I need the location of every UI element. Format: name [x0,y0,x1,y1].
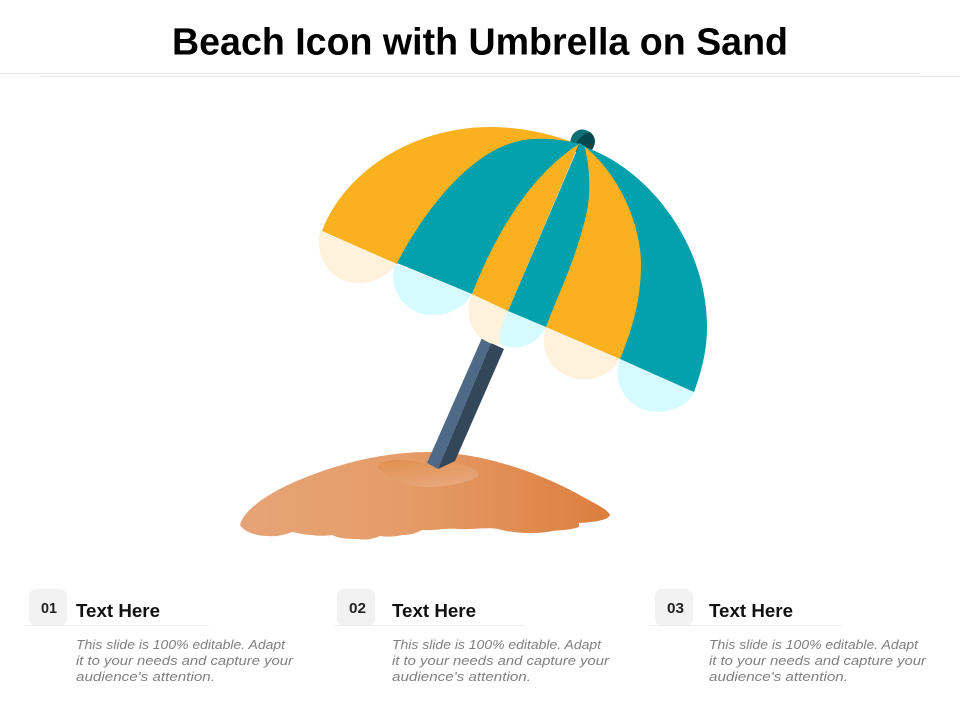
canopy panel 6 teal [579,143,707,392]
description 02: it to your needs and capture your [392,653,610,668]
description 01: This slide is 100% editable. Adapt [76,637,286,652]
item 03 [651,589,927,684]
description 03 [709,637,927,684]
sand mound [240,452,610,540]
item 02 [333,589,610,684]
description 02 [392,637,610,684]
umbrella knob [567,127,598,157]
icon: beach umbrella on sand [240,127,707,540]
description 02: This slide is 100% editable. Adapt [392,637,602,652]
number badge 03: 03 [667,600,684,617]
heading 01: Text Here [76,601,160,621]
umbrella canopy [322,127,707,392]
number badge 01 [29,589,67,626]
canopy panel 5 yellow [546,146,641,359]
description 03: it to your needs and capture your [709,653,927,668]
description 03: audience's attention. [709,669,848,684]
heading 02: Text Here [392,601,476,621]
description 01: it to your needs and capture your [76,653,294,668]
description 01: audience's attention. [76,669,215,684]
canopy panel 1 yellow [322,127,572,264]
title: Beach Icon with Umbrella on Sand [172,22,788,64]
sand hole [377,460,478,487]
scallop valance [319,231,694,412]
number badge 02: 02 [349,600,366,617]
item 01 [25,589,294,684]
description 02: audience's attention. [392,669,531,684]
canopy panel 3 yellow [472,144,579,311]
number badge 01: 01 [41,600,57,617]
canopy panel 4 teal [508,143,589,327]
umbrella pole [427,338,504,469]
number badge 03 [655,589,693,626]
description 01 [76,637,294,684]
canopy panel 2 teal [397,139,580,294]
number badge 02 [337,589,375,626]
description 03: This slide is 100% editable. Adapt [709,637,919,652]
heading 03: Text Here [709,601,793,621]
